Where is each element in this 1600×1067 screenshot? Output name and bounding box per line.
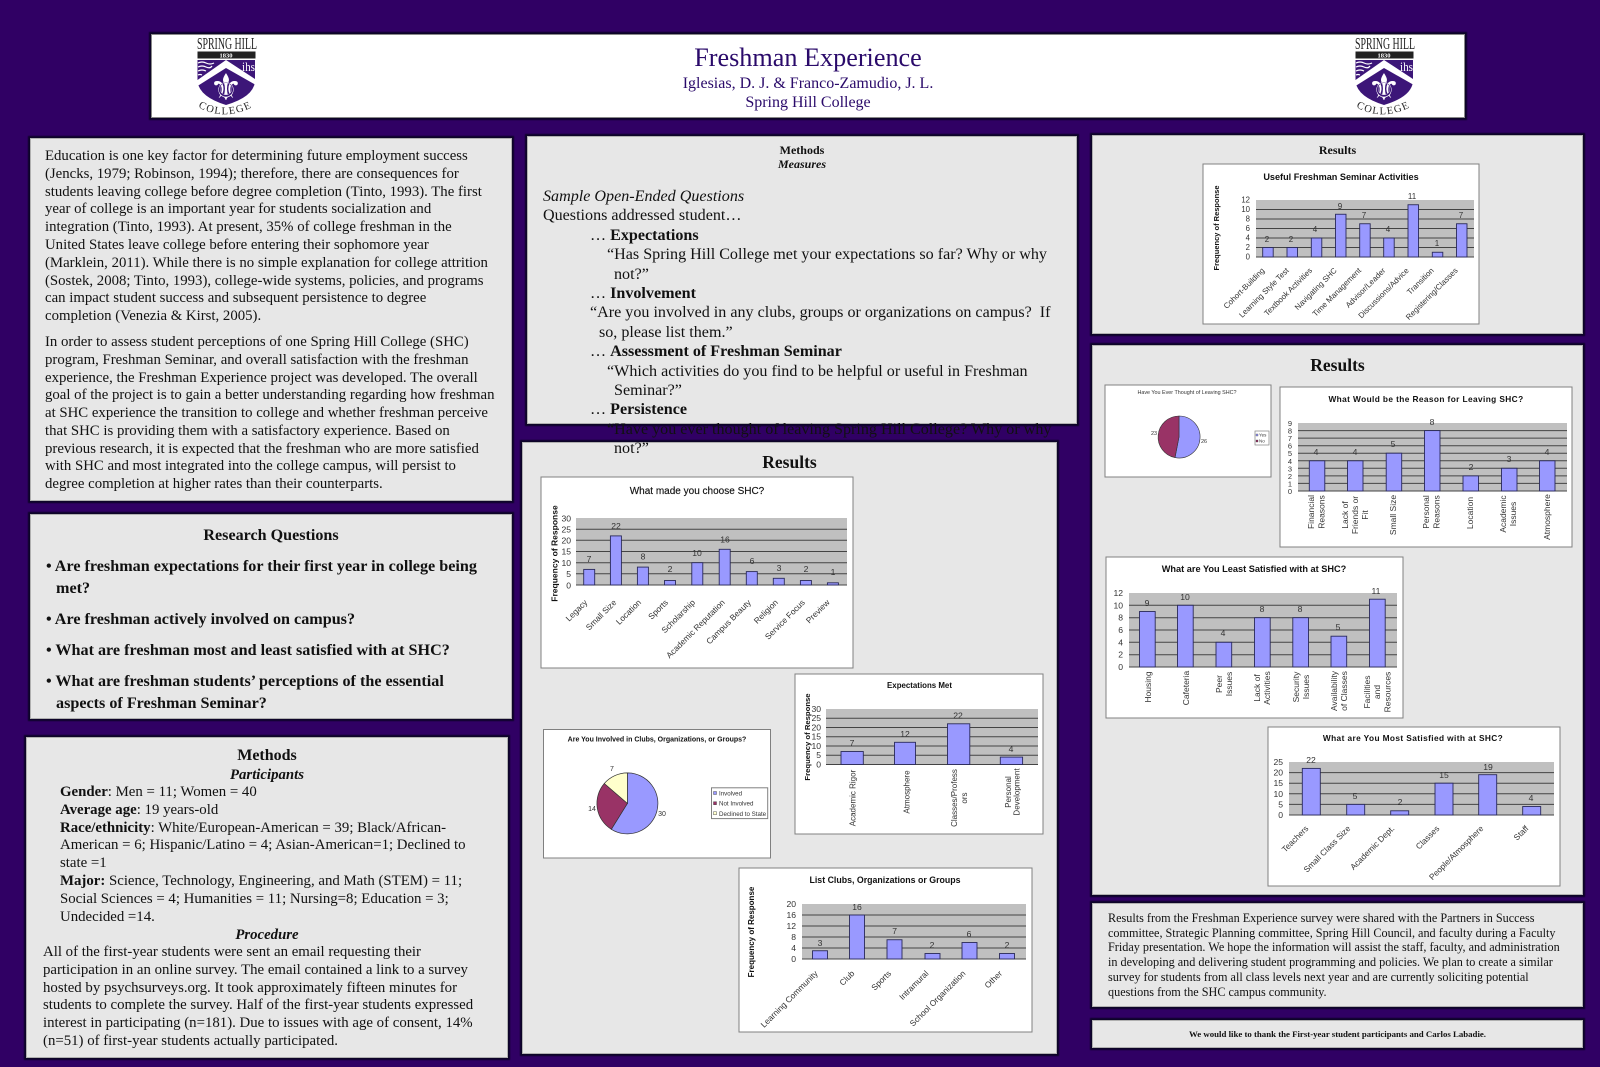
results heading middle: Results (762, 452, 817, 472)
bar chart: What Would be the Reason for Leaving SHC: 0 (1288, 487, 1292, 496)
bar chart: List Clubs, Organizations or Groups: 20 (786, 899, 796, 909)
bar chart: What Would be the Reason for Leaving SHC: Friends or (1350, 496, 1360, 534)
bar chart: List Clubs, Organizations or Groups: Frequency of Response (747, 886, 756, 977)
bar chart: Useful Freshman Seminar Activities: Navigating SHC (1293, 266, 1339, 312)
bar chart: What are You Least Satisfied with at SHC (1106, 557, 1403, 718)
bar chart: What are You Most Satisfied with at SHC: 20 (1273, 768, 1283, 778)
results heading top right: Results (1319, 143, 1356, 157)
icon: Spring Hill College logo left: COLLEGE (200, 102, 251, 114)
question 3: • What are freshman most and least satisfied with at SHC? (46, 642, 450, 659)
header banner (151, 34, 1465, 118)
bar chart: What Would be the Reason for Leaving SHC: 5 (1391, 439, 1396, 449)
bar chart: Useful Freshman Seminar Activities: Cohort-Building (1222, 266, 1266, 311)
icon: Spring Hill College logo left: SPRING HILL (197, 34, 257, 53)
bar chart: List Clubs, Organizations or Groups: List Clubs, Organizations or Groups (809, 875, 961, 885)
bar chart: What are You Most Satisfied with at SHC: 22 (1306, 755, 1316, 765)
bar chart: What Would be the Reason for Leaving SHC: 8 (1430, 417, 1435, 427)
participant details: Gender: Men = 11; Women = 40 (60, 784, 257, 800)
procedure text: interest in participating (n=181). Due to issues with age of consent, 14% (43, 1015, 473, 1031)
pie chart: Have You Ever Thought of Leaving SHC: 26 (1201, 439, 1207, 445)
sample open-ended questions text: … Assessment of Freshman Seminar (590, 343, 842, 360)
question list (46, 558, 477, 596)
bar chart: What made you choose SHC: Preview (804, 597, 832, 625)
bar chart: Expectations Met: Development (1012, 768, 1022, 816)
bar chart: List Clubs, Organizations or Groups: 16 (786, 910, 796, 920)
bar chart: What Would be the Reason for Leaving SHC: Reasons (1432, 495, 1442, 529)
bar chart: List Clubs, Organizations or Groups: Sports (869, 968, 893, 992)
sample open-ended questions text: “Are you involved in any clubs, groups or organizations on campus? If (590, 304, 1051, 321)
icon: Spring Hill College logo right: ihs (1400, 60, 1413, 74)
bar chart: What made you choose SHC: 25 (561, 524, 571, 534)
participant details: Race/ethnicity: White/European-American = 39; Black/African- (60, 820, 446, 836)
measures heading: Measures (778, 157, 826, 171)
icon: Spring Hill College logo right: COLLEGE (1358, 102, 1409, 114)
bar chart: Useful Freshman Seminar Activities: 4 (1386, 225, 1391, 234)
introduction paragraph 1: (Jencks, 1979; Robinson, 1994); therefore, there are consequences for (45, 166, 459, 182)
panel: introduction (30, 138, 512, 501)
bar chart: What are You Most Satisfied with at SHC: 0 (1278, 810, 1283, 820)
bar chart: What are You Most Satisfied with at SHC: Staff (1511, 823, 1531, 842)
bar chart: What made you choose SHC: 1 (831, 567, 836, 577)
bar chart: List Clubs, Organizations or Groups: 2 (1005, 940, 1010, 950)
bar chart: Expectations Met: 7 (850, 738, 855, 748)
bar chart: Useful Freshman Seminar Activities: Registering/Classes (1404, 266, 1460, 322)
bar chart: What made you choose SHC: Scholarship (659, 597, 697, 635)
bar chart: What Would be the Reason for Leaving SHC: 9 (1288, 419, 1292, 428)
measures heading (778, 143, 826, 171)
conclusions text: in developing and delivering student programming and policies. We plan to create a similar (1108, 955, 1553, 969)
sample open-ended questions text: Questions addressed student… (543, 207, 741, 224)
bar chart: List Clubs, Organizations or Groups: School Organization (908, 968, 968, 1028)
pie chart: Are You Involved in Clubs: 30 (658, 811, 666, 818)
conclusions text: committee, Strategic Planning committee, Spring Hill Council, and faculty during a Faculty (1108, 926, 1555, 940)
introduction paragraph 1: students leaving college before degree completion (Tinto, 1993). The first (45, 184, 482, 200)
sample open-ended questions text: “Have you ever thought of leaving Spring Hill College? Why or why (607, 421, 1051, 438)
introduction paragraph 1: United States leave college before entering their sophomore year (45, 237, 429, 253)
bar chart: What made you choose SHC: 2 (668, 564, 673, 574)
participant details: Undecided =14. (60, 909, 155, 925)
bar chart: What made you choose SHC: Sports (646, 597, 670, 621)
bar chart: What made you choose SHC: 20 (561, 536, 571, 546)
pie chart: Are You Involved in Clubs: 7 (610, 766, 614, 773)
bar chart: Useful Freshman Seminar Activities: 4 (1313, 225, 1318, 234)
icon: Spring Hill College logo left: ihs (242, 60, 255, 74)
pie chart: Have You Ever Thought of Leaving SHC: 23 (1151, 431, 1157, 437)
conclusions text (1108, 911, 1560, 999)
bar chart: What Would be the Reason for Leaving SHC: Personal (1421, 495, 1431, 529)
bar chart: What Would be the Reason for Leaving SHC: 6 (1288, 442, 1292, 451)
panel: conclusions (1092, 903, 1583, 1007)
question 4 (46, 673, 444, 712)
bar chart: What are You Most Satisfied with at SHC: Small Class Size (1301, 823, 1353, 874)
bar chart: Useful Freshman Seminar Activities: 1 (1435, 239, 1440, 248)
panel: acknowledgement (1092, 1020, 1583, 1048)
participant details: Major: Science, Technology, Engineering, and Math (STEM) = 11; (60, 873, 462, 889)
bar chart: Expectations Met: 25 (811, 713, 821, 723)
bar chart: Useful Freshman Seminar Activities: 12 (1241, 196, 1250, 204)
introduction paragraph 1: (Marklein, 2011). While there is no simple explanation for college attrition (45, 255, 488, 271)
icon: Spring Hill College logo right: SPRING HILL (1355, 34, 1415, 53)
bar chart: Expectations Met: Classes/Profess (950, 769, 959, 827)
sample open-ended questions text: Seminar?” (614, 382, 682, 399)
bar chart: Useful Freshman Seminar Activities: Frequency of Response (1212, 185, 1221, 271)
bar chart: What Would be the Reason for Leaving SHC: 4 (1314, 447, 1319, 457)
question 4: • What are freshman students’ perceptions of the essential (46, 673, 444, 690)
bar chart: Useful Freshman Seminar Activities: 7 (1362, 211, 1367, 220)
bar chart: What made you choose SHC: 7 (587, 554, 592, 564)
bar chart: What Would be the Reason for Leaving SHC: Lack of (1340, 501, 1350, 529)
bar chart: What are You Least Satisfied with at SHC: Housing (1143, 671, 1153, 703)
bar chart: Useful Freshman Seminar Activities: 9 (1338, 202, 1343, 211)
bar chart: What Would be the Reason for Leaving SHC: 8 (1288, 426, 1292, 436)
bar chart: What are You Least Satisfied with at SHC: 6 (1118, 625, 1123, 635)
sample open-ended questions text: so, please list them.” (599, 324, 733, 341)
question list: • Are freshman expectations for their first year in college being (46, 558, 477, 575)
pie chart: Are You Involved in Clubs: Are You Involved in Clubs, Organizations, or Groups? (568, 736, 746, 744)
bar chart: What made you choose SHC: 10 (692, 548, 702, 558)
bar chart: What are You Most Satisfied with at SHC: What are You Most Satisfied with at SHC? (1323, 733, 1503, 743)
bar chart: What made you choose SHC: Campus Beauty (704, 597, 753, 646)
bar chart: What made you choose SHC: 2 (804, 564, 809, 574)
bar chart: List Clubs, Organizations or Groups: 6 (967, 929, 972, 939)
measures heading: Methods (780, 143, 824, 157)
methods heading: Methods (237, 747, 297, 764)
bar chart: Useful Freshman Seminar Activities: Textbook Activities (1262, 266, 1314, 318)
sample open-ended questions text: not?” (614, 440, 649, 457)
conclusions text: questions from the SHC campus community. (1108, 985, 1327, 999)
sample open-ended questions text: … Persistence (590, 401, 687, 418)
bar chart: What are You Least Satisfied with at SHC: Issues (1224, 672, 1234, 696)
bar chart: What are You Most Satisfied with at SHC: 15 (1273, 778, 1283, 788)
bar chart: Expectations Met: 22 (953, 710, 963, 720)
bar chart: What Would be the Reason for Leaving SHC: 4 (1353, 447, 1358, 457)
bar chart: What Would be the Reason for Leaving SHC: Fit (1360, 510, 1370, 520)
bar chart: Expectations Met: Academic Rigor (848, 769, 858, 826)
bar chart: What made you choose SHC: 5 (566, 569, 571, 579)
bar chart: List Clubs, Organizations or Groups: Other (982, 968, 1004, 990)
panel: results top right (1092, 135, 1583, 334)
bar chart: What made you choose SHC: 8 (641, 552, 646, 562)
bar chart: What are You Most Satisfied with at SHC: People/Atmosphere (1427, 823, 1486, 882)
bar chart: What made you choose SHC: Frequency of Response (550, 505, 560, 602)
bar chart: What are You Least Satisfied with at SHC: Security (1291, 671, 1301, 702)
introduction paragraph 1: integration (Tinto, 1993). At present, 35% of college freshman in the (45, 219, 452, 235)
bar chart: Useful Freshman Seminar Activities: Useful Freshman Seminar Activities (1263, 172, 1419, 182)
bar chart: What made you choose SHC: Service Focus (763, 597, 807, 642)
bar chart: Useful Freshman Seminar Activities: 4 (1246, 234, 1251, 242)
bar chart: Useful Freshman Seminar Activities: Advisor/Leader (1344, 266, 1388, 310)
participants subheading: Participants (230, 767, 304, 783)
introduction paragraph 1: completion (Venezia & Kirst, 2005). (45, 308, 261, 324)
bar chart: What are You Least Satisfied with at SHC: Issues (1301, 675, 1311, 699)
bar chart: List Clubs, Organizations or Groups: 16 (852, 902, 862, 912)
bar chart: Expectations Met: 5 (816, 750, 821, 760)
introduction paragraph 2: with SHC and most integrated into the college campus, will persist to (45, 458, 456, 474)
bar chart: What are You Most Satisfied with at SHC: Academic Dept. (1348, 823, 1396, 872)
icon: Spring Hill College logo left: ⚜ (209, 66, 243, 109)
sample open-ended questions text: “Which activities do you find to be helpful or useful in Freshman (607, 363, 1028, 380)
bar chart: What Would be the Reason for Leaving SHC: What Would be the Reason for Leaving SHC? (1328, 394, 1524, 404)
results heading right: Results (1310, 355, 1365, 375)
panel: methods participants and procedure (26, 737, 508, 1058)
introduction paragraph 1: (Sostek, 2008; Tinto, 1993), college-wide systems, policies, and programs (45, 273, 484, 289)
bar chart: What are You Least Satisfied with at SHC: 8 (1260, 604, 1265, 614)
pie chart: Are You Involved in Clubs (544, 730, 770, 858)
bar chart: What made you choose SHC: 6 (750, 556, 755, 566)
bar chart: What are You Least Satisfied with at SHC: Cafeteria (1181, 670, 1191, 705)
bar chart: What are You Least Satisfied with at SHC: 8 (1298, 604, 1303, 614)
bar chart: What Would be the Reason for Leaving SHC: 5 (1288, 449, 1292, 458)
panel: methods measures (527, 136, 1077, 424)
bar chart: Useful Freshman Seminar Activities: 10 (1241, 205, 1251, 214)
introduction paragraph 2: that SHC is providing them with a satisfactory experience. Based on (45, 423, 450, 439)
bar chart: Useful Freshman Seminar Activities: 11 (1408, 192, 1417, 201)
bar chart: What made you choose SHC: Location (614, 597, 643, 627)
bar chart: What are You Most Satisfied with at SHC: 10 (1273, 789, 1283, 799)
bar chart: What made you choose SHC: 15 (561, 547, 571, 557)
bar chart: What Would be the Reason for Leaving SHC: Small Size (1388, 495, 1398, 535)
bar chart: List Clubs, Organizations or Groups: 12 (786, 921, 796, 931)
bar chart: Useful Freshman Seminar Activities: Discussions/Advice (1357, 266, 1411, 320)
introduction paragraph 1: year of college is an important year for students socialization and (45, 201, 431, 217)
bar chart: Expectations Met: Atmosphere (903, 770, 912, 814)
procedure subheading: Procedure (235, 927, 299, 943)
question 4: aspects of Freshman Seminar? (56, 694, 267, 712)
bar chart: What are You Least Satisfied with at SHC: 5 (1336, 622, 1341, 632)
bar chart: What are You Least Satisfied with at SHC: 8 (1118, 613, 1123, 623)
bar chart: What are You Least Satisfied with at SHC: What are You Least Satisfied with at SHC? (1162, 564, 1347, 574)
bar chart: What made you choose SHC: Legacy (563, 597, 590, 623)
bar chart: What Would be the Reason for Leaving SHC: Issues (1508, 502, 1518, 526)
bar chart: What are You Least Satisfied with at SHC: 12 (1113, 588, 1123, 598)
bar chart: What are You Most Satisfied with at SHC: Classes (1413, 823, 1441, 851)
bar chart: Expectations Met: 20 (811, 722, 821, 732)
participant details: Social Sciences = 4; Humanities = 11; Nursing=8; Education = 3; (60, 891, 449, 907)
pie chart: Have You Ever Thought of Leaving SHC: Have You Ever Thought of Leaving SHC? (1137, 390, 1237, 396)
panel: results middle (522, 442, 1057, 1054)
conclusions text: Results from the Freshman Experience survey were shared with the Partners in Success (1108, 911, 1534, 925)
bar chart: What made you choose SHC: Academic Reputation (664, 597, 727, 660)
bar chart: What are You Least Satisfied with at SHC: Resources (1382, 672, 1392, 712)
icon: Spring Hill College logo right (1355, 34, 1415, 114)
procedure text: All of the first-year students were sent an email requesting their (43, 944, 421, 960)
pie chart: Are You Involved in Clubs: 14 (588, 806, 596, 813)
bar chart: Useful Freshman Seminar Activities: 2 (1246, 243, 1250, 252)
procedure text: (n=51) of first-year students actually participated. (43, 1033, 338, 1049)
bar chart: What are You Least Satisfied with at SHC: 11 (1372, 586, 1381, 596)
icon: Spring Hill College logo right: ⚜ (1367, 66, 1401, 109)
bar chart: What made you choose SHC (541, 477, 853, 668)
bar chart: Expectations Met: Frequency of Response (803, 693, 812, 781)
bar chart: What made you choose SHC: Small Size (584, 597, 619, 632)
bar chart: List Clubs, Organizations or Groups: 8 (791, 932, 796, 942)
bar chart: What Would be the Reason for Leaving SHC: 4 (1288, 457, 1292, 466)
bar chart: What are You Least Satisfied with at SHC: 9 (1145, 598, 1150, 608)
panel: results right (1092, 345, 1583, 895)
bar chart: What are You Least Satisfied with at SHC: of Classes (1339, 671, 1349, 711)
participant details: Average age: 19 years-old (60, 802, 218, 818)
bar chart: What Would be the Reason for Leaving SHC: 3 (1288, 464, 1292, 473)
bar chart: Expectations Met: 15 (811, 732, 821, 742)
introduction paragraph 2: experience, the Freshman Experience project was developed. The overall (45, 370, 478, 386)
bar chart: What are You Most Satisfied with at SHC: 15 (1439, 770, 1449, 780)
bar chart: Expectations Met: Personal (1004, 776, 1013, 808)
research questions heading: Research Questions (203, 527, 339, 544)
bar chart: Useful Freshman Seminar Activities: 2 (1289, 235, 1294, 244)
procedure text: participation in an online survey. The email contained a link to a survey (43, 962, 468, 978)
bar chart: Useful Freshman Seminar Activities: Time Management (1311, 265, 1364, 318)
question 2: • Are freshman actively involved on campus? (46, 611, 355, 628)
bar chart: List Clubs, Organizations or Groups: 0 (791, 954, 796, 964)
bar chart: What are You Least Satisfied with at SHC: 0 (1118, 662, 1123, 672)
sample open-ended questions text: “Has Spring Hill College met your expectations so far? Why or why (607, 246, 1047, 263)
bar chart: What are You Most Satisfied with at SHC (1268, 727, 1560, 886)
bar chart: Useful Freshman Seminar Activities: 6 (1246, 224, 1250, 233)
sample open-ended questions text: … Involvement (590, 285, 696, 302)
bar chart: List Clubs, Organizations or Groups: Intramural (897, 968, 931, 1002)
bar chart: What Would be the Reason for Leaving SHC: Financial (1306, 495, 1316, 529)
bar chart: What are You Most Satisfied with at SHC: 2 (1398, 797, 1403, 807)
bar chart: Useful Freshman Seminar Activities: Transition (1405, 266, 1436, 297)
bar chart: What made you choose SHC: 3 (777, 563, 782, 573)
bar chart: What are You Least Satisfied with at SHC: Availability (1329, 670, 1339, 711)
bar chart: What are You Least Satisfied with at SHC: and (1372, 685, 1382, 699)
bar chart: What are You Least Satisfied with at SHC: 2 (1118, 650, 1123, 660)
introduction paragraph 2: degree completion at higher rates than their counterparts. (45, 476, 383, 492)
poster title: Freshman Experience (694, 43, 922, 72)
bar chart: What are You Most Satisfied with at SHC: Teachers (1280, 823, 1310, 854)
bar chart: What made you choose SHC: 16 (720, 534, 730, 544)
bar chart: What are You Most Satisfied with at SHC: 25 (1273, 757, 1283, 767)
bar chart: What made you choose SHC: 10 (561, 558, 571, 568)
conclusions text: Friday presentation. We hope the information will assist the staff, faculty, and administration (1108, 940, 1560, 954)
question list: met? (56, 580, 90, 596)
bar chart: What Would be the Reason for Leaving SHC: 2 (1469, 462, 1474, 472)
sample open-ended questions text (543, 188, 1052, 457)
icon: Spring Hill College logo right: 1830 (1378, 52, 1390, 59)
bar chart: What Would be the Reason for Leaving SHC: 4 (1545, 447, 1550, 457)
procedure text: hosted by psychsurveys.org. It took approximately fifteen minutes for (43, 980, 457, 996)
participant details: American = 6; Hispanic/Latino = 4; Asian-American=1; Declined to (60, 837, 466, 853)
bar chart: What Would be the Reason for Leaving SHC: Academic (1498, 495, 1508, 533)
pie chart: Have You Ever Thought of Leaving SHC: No (1259, 438, 1265, 444)
bar chart: List Clubs, Organizations or Groups: 3 (818, 938, 823, 948)
bar chart: What made you choose SHC: 30 (561, 514, 571, 524)
bar chart: Useful Freshman Seminar Activities: 2 (1265, 235, 1270, 244)
bar chart: List Clubs, Organizations or Groups: 4 (791, 943, 796, 953)
introduction paragraph 2: previous research, it is expected that the freshman who are more satisfied (45, 440, 479, 456)
pie chart: Have You Ever Thought of Leaving SHC (1105, 385, 1271, 477)
bar chart: What are You Least Satisfied with at SHC: 4 (1221, 628, 1226, 638)
bar chart: What made you choose SHC: Religion (752, 597, 780, 626)
pie chart: Are You Involved in Clubs: Not Involved (719, 801, 754, 808)
introduction paragraph 2: goal of the project is to gain a better understanding regarding how freshman (45, 387, 495, 403)
bar chart: Expectations Met: 0 (816, 760, 821, 770)
conclusions text: survey for students from all class levels next year and are currently soliciting potential (1108, 970, 1529, 984)
participant details: state =1 (60, 855, 107, 871)
bar chart: What are You Least Satisfied with at SHC: Peer (1214, 675, 1224, 693)
pie chart: Have You Ever Thought of Leaving SHC: Yes (1259, 432, 1267, 438)
introduction paragraph 2: In order to assess student perceptions of one Spring Hill College (SHC) (45, 334, 469, 350)
bar chart: Useful Freshman Seminar Activities: 0 (1246, 252, 1251, 262)
bar chart: Expectations Met: 4 (1009, 744, 1014, 754)
bar chart: What Would be the Reason for Leaving SHC: Location (1465, 497, 1475, 529)
bar chart: What are You Least Satisfied with at SHC: 10 (1113, 600, 1123, 610)
bar chart: What made you choose SHC: What made you choose SHC? (630, 486, 765, 497)
panel: research questions (30, 514, 512, 719)
bar chart: Useful Freshman Seminar Activities (1203, 164, 1479, 324)
bar chart: Useful Freshman Seminar Activities: Learning Style Test (1237, 265, 1291, 319)
bar chart: What are You Most Satisfied with at SHC: 5 (1278, 799, 1283, 809)
bar chart: Useful Freshman Seminar Activities: 8 (1246, 214, 1250, 224)
bar chart: List Clubs, Organizations or Groups: Club (837, 968, 857, 987)
bar chart: Expectations Met: 10 (811, 741, 821, 751)
introduction paragraph 2 (45, 334, 495, 492)
bar chart: What made you choose SHC: 22 (611, 521, 621, 531)
pie chart: Are You Involved in Clubs: Involved (719, 790, 743, 798)
bar chart: Expectations Met: Expectations Met (887, 681, 952, 690)
introduction paragraph 1: Education is one key factor for determining future employment success (45, 148, 468, 164)
bar chart: What are You Least Satisfied with at SHC: Facilities (1362, 675, 1372, 709)
acknowledgement text: We would like to thank the First-year student participants and Carlos Labadie. (1189, 1029, 1486, 1039)
bar chart: What are You Most Satisfied with at SHC: 5 (1353, 791, 1358, 801)
bar chart: Expectations Met: ors (960, 792, 969, 804)
bar chart: What Would be the Reason for Leaving SHC: 2 (1288, 472, 1292, 481)
sample open-ended questions text: Sample Open-Ended Questions (543, 188, 744, 205)
bar chart: Useful Freshman Seminar Activities: 7 (1459, 211, 1464, 220)
bar chart: Expectations Met: 30 (811, 704, 821, 714)
introduction paragraph 1: can impact student success and subsequent persistence to degree (45, 290, 426, 306)
institution: Spring Hill College (745, 94, 871, 111)
bar chart: What are You Least Satisfied with at SHC: 10 (1180, 592, 1190, 602)
bar chart: List Clubs, Organizations or Groups: 7 (892, 926, 897, 936)
bar chart: What Would be the Reason for Leaving SHC: 3 (1507, 454, 1512, 464)
bar chart: What Would be the Reason for Leaving SHC: 1 (1288, 479, 1292, 488)
pie chart: Are You Involved in Clubs: Declined to State (719, 811, 767, 818)
authors: Iglesias, D. J. & Franco-Zamudio, J. L. (683, 75, 933, 92)
bar chart: What Would be the Reason for Leaving SHC: Atmosphere (1542, 494, 1552, 540)
bar chart: List Clubs, Organizations or Groups: 2 (930, 940, 935, 950)
procedure text: students to complete the survey. Half of the first-year students expressed (43, 997, 473, 1013)
bar chart: List Clubs, Organizations or Groups (739, 868, 1032, 1032)
bar chart: Expectations Met (795, 674, 1043, 834)
icon: Spring Hill College logo left (197, 34, 257, 114)
bar chart: Expectations Met: 12 (900, 729, 910, 739)
bar chart: What Would be the Reason for Leaving SHC: Reasons (1316, 495, 1326, 529)
bar chart: What are You Least Satisfied with at SHC: Lack of (1252, 674, 1262, 702)
bar chart: What are You Least Satisfied with at SHC: 4 (1118, 637, 1123, 647)
bar chart: What are You Least Satisfied with at SHC: Activities (1262, 671, 1272, 705)
bar chart: What made you choose SHC: 0 (566, 580, 571, 590)
bar chart: What are You Most Satisfied with at SHC: 4 (1529, 793, 1534, 803)
introduction paragraph 1 (45, 148, 488, 324)
bar chart: What Would be the Reason for Leaving SHC: 7 (1288, 434, 1292, 443)
introduction paragraph 2: at SHC experience the transition to college and whether freshman perceive (45, 405, 488, 421)
sample open-ended questions text: … Expectations (590, 227, 699, 244)
participant details (60, 784, 466, 925)
bar chart: List Clubs, Organizations or Groups: Learning Community (759, 968, 820, 1030)
icon: Spring Hill College logo left: 1830 (220, 52, 232, 59)
procedure text (43, 944, 473, 1049)
sample open-ended questions text: not?” (614, 266, 649, 283)
bar chart: What are You Most Satisfied with at SHC: 19 (1483, 762, 1493, 772)
bar chart: What Would be the Reason for Leaving SHC (1280, 387, 1572, 547)
introduction paragraph 2: program, Freshman Seminar, and overall satisfaction with the freshman (45, 352, 468, 368)
